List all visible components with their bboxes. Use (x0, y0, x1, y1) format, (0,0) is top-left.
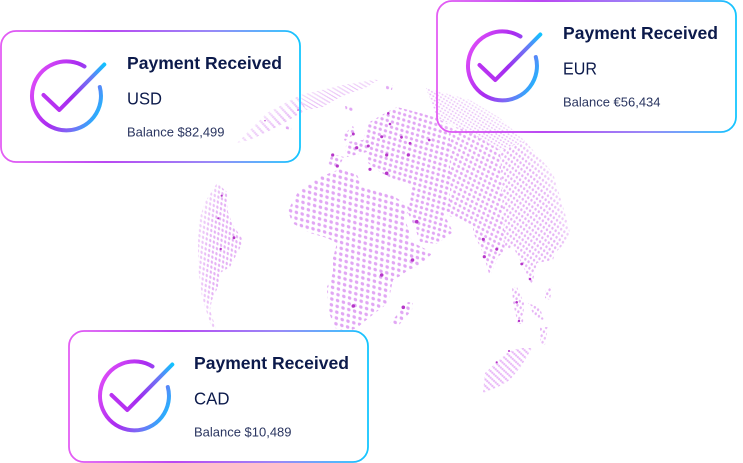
Arctic islands (285, 85, 393, 130)
heading: Payment Received (127, 53, 282, 73)
central Asia and India (447, 125, 505, 277)
Indonesia and islands (512, 287, 552, 345)
icon: check circle (100, 361, 172, 430)
east Asia (500, 141, 570, 285)
currency: CAD (194, 388, 230, 408)
icon: check circle (32, 61, 104, 130)
British Isles (342, 126, 356, 141)
heading: Payment Received (563, 23, 718, 43)
card: USD (1, 31, 300, 162)
heading: Payment Received (194, 353, 349, 373)
icon: check circle (468, 31, 540, 100)
Iberia (327, 154, 344, 168)
limb fade (192, 70, 576, 454)
highlighted city dots (217, 109, 531, 363)
Arctic band east (300, 79, 380, 110)
card outline (437, 1, 736, 132)
card outline (1, 31, 300, 162)
balance: Balance $82,499 (127, 124, 224, 140)
balance: Balance €56,434 (563, 94, 660, 110)
South America (198, 183, 243, 338)
balance: Balance $10,489 (194, 424, 292, 440)
card: EUR (437, 1, 736, 132)
Africa (288, 169, 433, 332)
Madagascar (390, 302, 413, 325)
Arctic band west (237, 95, 306, 143)
card outline (69, 331, 368, 462)
Australia (483, 348, 532, 393)
Europe and west Asia (345, 107, 453, 244)
northern Asia limb (426, 88, 525, 150)
card: CAD (69, 331, 368, 462)
currency: USD (127, 88, 162, 108)
currency: EUR (563, 58, 597, 78)
dotted globe (192, 70, 576, 454)
